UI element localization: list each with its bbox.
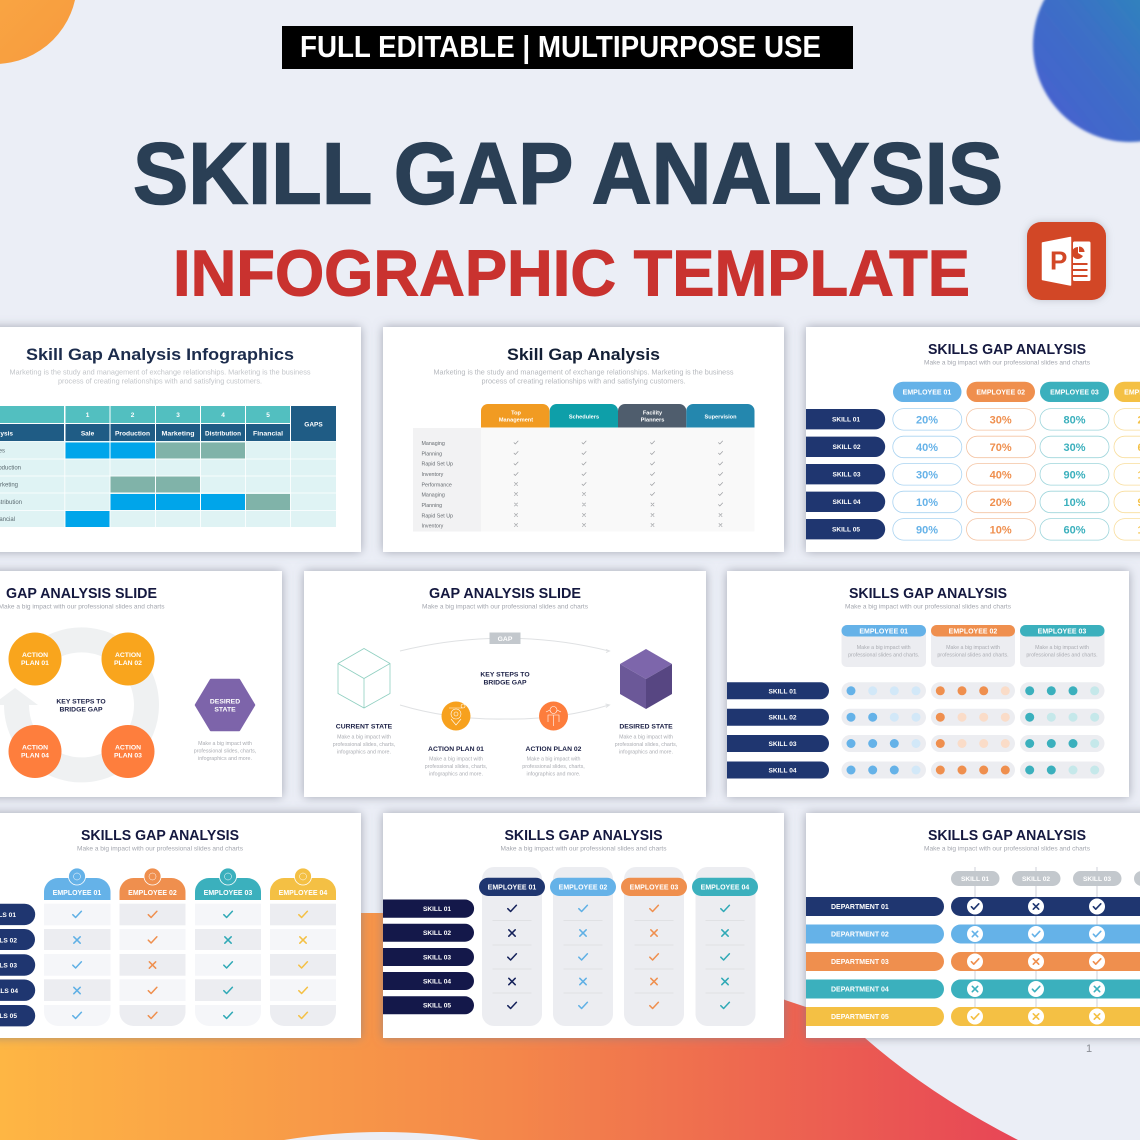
icon: solid purple cube [620, 649, 672, 709]
action plan 02 text [522, 746, 585, 778]
percentages: 90% [916, 524, 938, 536]
column headers: Top [511, 410, 521, 416]
skill pills: SKILL 03 [423, 954, 451, 962]
action plan circles: ACTION [115, 744, 141, 752]
decorative bottom gradient wave [0, 913, 1018, 1140]
action plan 02 text: Make a big impact with [527, 756, 580, 762]
row labels: Rapid Set Up [422, 513, 453, 519]
subtitle: INFOGRAPHIC TEMPLATE [173, 236, 970, 310]
skill pills: SKILL 01 [423, 906, 451, 913]
employee tabs: EMPLOYEE 01 [53, 890, 101, 897]
desired state hexagon: STATE [214, 706, 236, 714]
description: Marketing is the study and management of exchange relationships. Marketing is the business [10, 370, 311, 376]
panel: skill gap analysis infographics table [0, 327, 361, 552]
employee cards: professional slides and charts. [848, 652, 919, 658]
action plan circles: PLAN 03 [114, 752, 142, 760]
table labels: 4 [221, 412, 225, 419]
table labels: GAPS [304, 422, 323, 428]
row labels: Managing [422, 493, 445, 499]
employee pills: EMPLOYEE 04 [701, 884, 749, 892]
skill pills: SKILL 01 [768, 688, 797, 695]
percentages: 60% [1063, 524, 1086, 536]
icon: powerpoint logo [1027, 222, 1106, 300]
current state text: CURRENT STATE [336, 724, 393, 730]
column headers: Supervision [704, 414, 737, 420]
description: Make a big impact with our professional slides and charts [845, 604, 1012, 610]
employee cards: Make a big impact with [946, 645, 1000, 651]
column backgrounds [482, 867, 756, 1026]
center label: KEY STEPS TO [480, 672, 530, 678]
row dividers [492, 920, 744, 993]
desired state description [194, 741, 256, 762]
desired state description: infographics and more. [198, 756, 252, 762]
department bars: DEPARTMENT 01 [831, 904, 889, 911]
heading: GAP ANALYSIS SLIDE [429, 585, 581, 602]
skill pills: SKILL 05 [423, 1002, 451, 1010]
grid cells [44, 904, 336, 1026]
description: Make a big impact with our professional slides and charts [422, 604, 589, 610]
table labels: Production [115, 430, 150, 438]
panel: skills check grid with icons [0, 813, 361, 1038]
department bars: DEPARTMENT 02 [831, 932, 889, 938]
heading: Skill Gap Analysis [507, 345, 660, 364]
percentages: 90% [1063, 470, 1086, 482]
heading: SKILLS GAP ANALYSIS [504, 827, 662, 844]
desired state text: infographics and more. [619, 750, 673, 756]
action plan 01 text: infographics and more. [429, 772, 483, 778]
row labels: Inventory [422, 524, 444, 530]
check and cross marks [514, 441, 723, 526]
desired state text: Make a big impact with [619, 734, 673, 740]
icon: powerpoint logo: P [1050, 246, 1067, 276]
column headers: Facility [643, 410, 663, 416]
center label [56, 698, 106, 714]
heading: SKILLS GAP ANALYSIS [928, 827, 1086, 844]
employee tabs: EMPLOYEE 03 [204, 890, 252, 897]
skill pills [951, 871, 1140, 886]
connector arcs [400, 638, 610, 719]
desired state description: professional slides, charts, [194, 748, 256, 754]
percentages: 80% [1063, 414, 1086, 426]
skill pills: SKILL 03 [1083, 876, 1111, 883]
percentages: 30% [990, 414, 1012, 426]
panel: skills gap percentages [806, 327, 1140, 552]
employee pills: EMPLOYEE 02 [976, 390, 1025, 396]
desired state hexagon: DESIRED [210, 698, 240, 706]
skill pills: SKILL 02 [768, 715, 797, 722]
gap label: GAP [498, 636, 513, 643]
skill pills: SKILL 04 [768, 768, 797, 774]
skill pills: SKILL 03 [768, 741, 797, 748]
employee cards: EMPLOYEE 01 [859, 628, 908, 636]
desired state description: Make a big impact with [198, 741, 252, 747]
description [10, 370, 311, 386]
action plan 02 text: professional slides, charts, [522, 764, 585, 770]
main title: SKILL GAP ANALYSIS [133, 126, 1003, 222]
page number: 1 [1086, 1043, 1092, 1055]
employee pills: EMPLOYEE 01 [488, 884, 536, 892]
description: Marketing is the study and management of exchange relationships. Marketing is the business [434, 370, 734, 376]
description [434, 370, 734, 386]
banner: full editable: FULL EDITABLE | MULTIPURPOSE USE [300, 29, 821, 64]
panel: skills dot ratings [727, 571, 1129, 797]
desired state text [615, 724, 677, 756]
check and cross marks [73, 911, 307, 1018]
employee pills [479, 878, 758, 896]
skill pills [0, 904, 35, 1026]
action plan circles: PLAN 02 [114, 660, 142, 667]
employee pills [893, 382, 1140, 402]
employee cards: EMPLOYEE 03 [1038, 628, 1086, 636]
gap label [490, 632, 520, 644]
current state text: infographics and more. [337, 750, 391, 756]
percentages: 10% [990, 524, 1012, 536]
description: Make a big impact with our professional slides and charts [77, 846, 244, 852]
skill bars [951, 897, 1140, 1026]
table body [413, 428, 754, 532]
action plan circles: PLAN 01 [21, 660, 49, 667]
description: Make a big impact with our professional slides and charts [0, 604, 165, 610]
panel: gap analysis current to desired [304, 571, 706, 797]
heading: GAP ANALYSIS SLIDE [6, 585, 157, 602]
center label: KEY STEPS TO [56, 698, 106, 706]
center label: BRIDGE GAP [59, 706, 103, 714]
action plan circles: ACTION [22, 652, 48, 659]
panel: skill gap analysis check table [383, 327, 784, 552]
skill pills: SKILL 02 [1022, 876, 1050, 883]
percentages: 40% [916, 442, 938, 454]
row labels: Inventory [422, 472, 444, 478]
percentages: 20% [990, 497, 1012, 509]
description: Make a big impact with our professional slides and charts [500, 846, 667, 852]
column headers: Planners [641, 418, 664, 424]
center label: BRIDGE GAP [483, 680, 527, 686]
skill pills: SKILL 05 [832, 526, 860, 534]
employee pills: EMPLOYEE 02 [559, 884, 607, 892]
column headers [481, 404, 754, 428]
table labels: 2 [131, 412, 135, 419]
description: process of creating relationships with and satisfying customers. [482, 378, 686, 386]
check and cross marks [508, 905, 729, 1008]
employee cards: EMPLOYEE 02 [949, 628, 997, 636]
current state text [333, 724, 395, 756]
employee cards: Make a big impact with [1035, 645, 1089, 651]
skill pills [806, 409, 885, 539]
dot tracks [842, 682, 1104, 778]
department bars: DEPARTMENT 03 [831, 959, 889, 966]
heading: Skill Gap Analysis Infographics [26, 345, 294, 364]
icon: action plan 01 [442, 702, 470, 730]
action plan circles: ACTION [115, 652, 141, 659]
row labels: Planning [422, 503, 442, 509]
row labels: Planning [422, 451, 442, 457]
row labels: Rapid Set Up [422, 462, 453, 468]
employee tabs [44, 868, 336, 900]
employee tabs: EMPLOYEE 02 [128, 890, 177, 897]
table labels: 3 [176, 412, 180, 419]
row labels: Managing [422, 441, 445, 447]
panel: skills check columns [383, 813, 784, 1038]
current state text: Make a big impact with [337, 734, 391, 740]
percentages: 30% [916, 470, 938, 482]
icon: action plan 02 [539, 702, 568, 730]
employee cards: Make a big impact with [857, 645, 911, 651]
table labels: Sale [81, 430, 95, 438]
skill pills: SKILL 03 [832, 472, 861, 478]
heading: SKILLS GAP ANALYSIS [928, 341, 1086, 358]
percentages [916, 414, 1140, 536]
action plan 02 text: infographics and more. [527, 772, 580, 778]
desired state text: DESIRED STATE [619, 724, 673, 730]
table labels: Distribution [205, 430, 241, 438]
value pills [893, 409, 1140, 540]
description: Make a big impact with our professional slides and charts [924, 846, 1091, 852]
action plan 01 text: professional slides, charts, [425, 764, 487, 770]
employee cards: professional slides and charts. [937, 652, 1009, 658]
percentages: 30% [1063, 442, 1086, 454]
skill pills [727, 682, 829, 778]
employee cards [842, 625, 1104, 667]
table labels: 5 [266, 412, 270, 419]
action plan 01 text [425, 746, 487, 778]
description: process of creating relationships with and satisfying customers. [58, 378, 262, 386]
rating dots employee 02 [936, 686, 1010, 774]
column headers: Schedulers [569, 414, 599, 420]
skill pills: SKILL 02 [832, 444, 861, 451]
action plan 01 text: Make a big impact with [429, 756, 483, 762]
decorative orange corner blob [0, 0, 77, 64]
action plan 02 text: ACTION PLAN 02 [526, 746, 582, 753]
employee cards: professional slides and charts. [1026, 652, 1098, 658]
percentages: 10% [1063, 497, 1086, 509]
desired state text: professional slides, charts, [615, 742, 677, 748]
table grid [0, 406, 336, 527]
current state text: professional slides, charts, [333, 742, 395, 748]
department bars [806, 897, 944, 1026]
action plan circles [8, 632, 154, 778]
rating dots employee 01 [846, 686, 920, 774]
cycle ring arrow [0, 640, 146, 770]
status marks [971, 904, 1101, 1019]
employee pills: EMPLOYEE 03 [630, 884, 678, 892]
action plan circles: ACTION [22, 744, 48, 752]
status circles [967, 898, 1105, 1024]
department bars: DEPARTMENT 04 [831, 986, 889, 994]
employee pills: EMPLOYEE 01 [903, 390, 951, 396]
department bars: DEPARTMENT 05 [831, 1014, 889, 1021]
table labels: 1 [86, 412, 90, 419]
percentages: 70% [990, 442, 1012, 454]
employee tabs: EMPLOYEE 04 [279, 890, 327, 897]
skill pills: SKILL 04 [832, 499, 861, 506]
column headers: Management [499, 418, 533, 424]
percentages: 40% [990, 470, 1012, 482]
table labels: Financial [253, 430, 283, 438]
vertical guide lines [975, 867, 1097, 1020]
rating dots employee 03 [1025, 686, 1099, 774]
employee pills: EMPLOYEE 03 [1050, 390, 1099, 396]
row labels: Performance [422, 482, 452, 488]
percentages: 10% [916, 497, 938, 509]
heading: SKILLS GAP ANALYSIS [81, 827, 239, 844]
desired state hexagon [196, 680, 254, 730]
description: Make a big impact with our professional slides and charts [924, 360, 1091, 366]
decorative blue circle [1033, 0, 1140, 142]
table labels [0, 412, 323, 523]
skill pills [383, 900, 474, 1014]
icon: outline cube [338, 648, 390, 708]
skill pills: SKILL 04 [423, 978, 451, 986]
action plan circles: PLAN 04 [21, 752, 49, 760]
center label [480, 672, 530, 686]
percentages: 20% [916, 414, 938, 426]
panel: department skills matrix [806, 813, 1140, 1038]
action plan 01 text: ACTION PLAN 01 [428, 746, 484, 753]
heading: SKILLS GAP ANALYSIS [849, 585, 1007, 602]
skill pills: SKILL 02 [423, 930, 451, 937]
skill pills: SKILL 01 [961, 876, 989, 883]
row labels [422, 441, 453, 530]
skill pills: SKILL 01 [832, 416, 860, 424]
panel: gap analysis cycle [0, 571, 282, 797]
table labels: Marketing [162, 430, 195, 438]
